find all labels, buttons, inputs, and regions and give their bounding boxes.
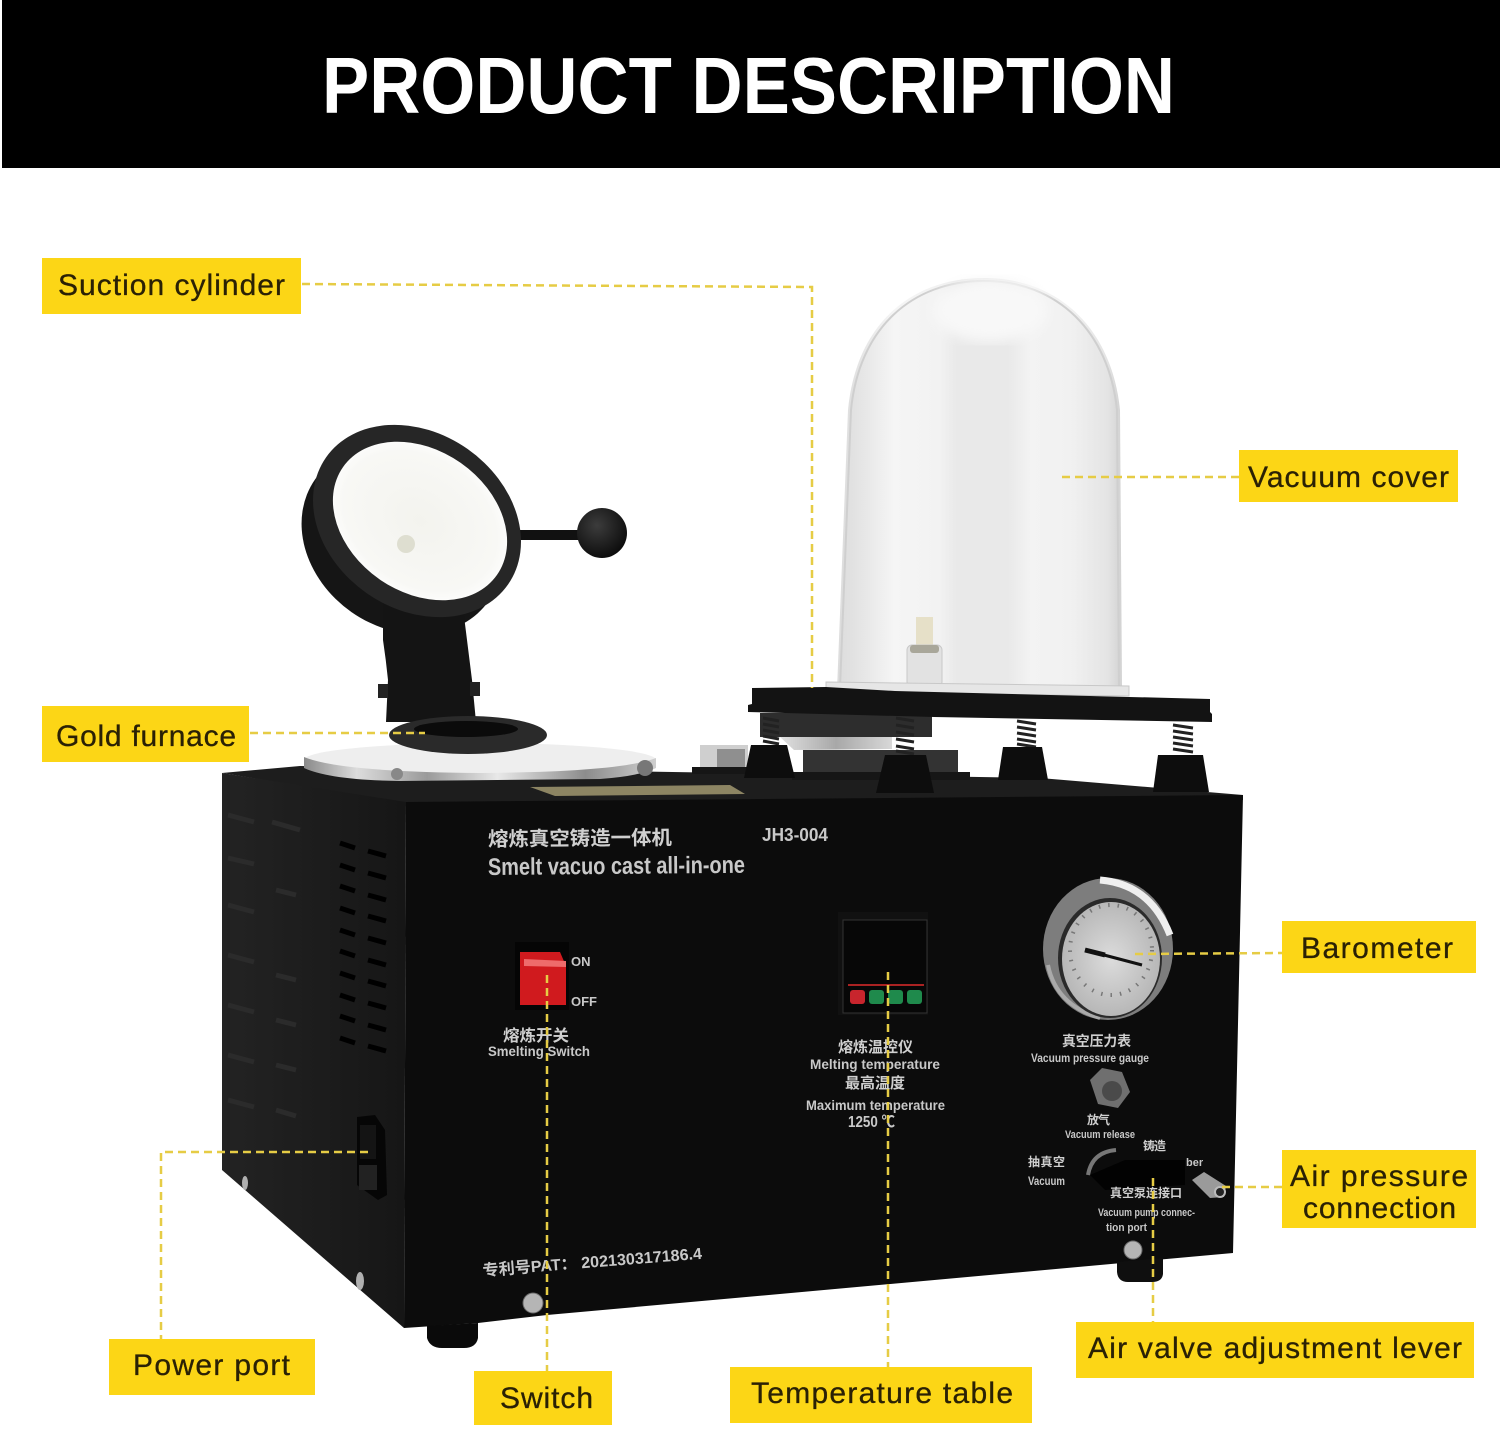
machine body [222,766,1243,1348]
support arm [383,600,476,722]
top surface [222,766,1243,804]
barometer [1031,878,1173,1065]
lid disc [304,743,656,777]
panel screws [523,1293,543,1313]
side panel [222,773,406,1328]
air valve lever: Vacuum [1028,1174,1065,1188]
panel printing: JH3-004 [762,825,828,845]
body feet [427,1323,478,1348]
temperature controller: 熔炼温控仪 [838,1038,913,1056]
label: power port: Power port [133,1349,291,1382]
label: temperature table: Temperature table [751,1377,1013,1410]
front panel [404,795,1243,1328]
handle rod [520,530,582,540]
smelting switch: Smelting Switch [488,1043,590,1059]
pour hole [397,535,415,553]
air connector [1192,1172,1226,1198]
label: vacuum cover [1239,450,1458,502]
label: gold furnace: Gold furnace [56,720,236,753]
title: PRODUCT DESCRIPTION [322,41,1175,130]
temperature controller: Maximum temperature [806,1097,945,1113]
smelting switch: OFF [571,994,597,1009]
label: temperature table [730,1367,1032,1423]
air valve lever: 抽真空 [1028,1154,1065,1169]
rubber feet [744,745,1209,793]
plate [748,687,1212,722]
header band [2,0,1500,168]
vacuum release valve [1065,1068,1135,1141]
crucible rim [276,385,558,657]
chamber disc [803,750,958,776]
vacuum cover dome [826,278,1129,696]
air valve lever [1028,1138,1204,1234]
air valve lever: 真空泵连接口 [1110,1185,1182,1200]
small cylinder [700,745,748,767]
panel printing: Smelt vacuo cast all-in-one [488,852,745,881]
label: gold furnace [42,706,249,762]
barometer: Vacuum pressure gauge [1031,1051,1149,1065]
vacuum plate assembly [692,687,1212,793]
air valve lever: ber [1186,1157,1204,1169]
glass flange [826,682,1129,696]
temperature controller: 1250 ℃ [848,1114,895,1131]
label: switch [474,1371,612,1425]
label: barometer: Barometer [1301,932,1453,965]
air valve lever: 铸造 [1143,1138,1166,1153]
barometer: 真空压力表 [1062,1033,1131,1049]
label: switch: Switch [500,1382,593,1415]
power port [357,1115,387,1200]
panel printing: 熔炼真空铸造一体机 [488,825,672,851]
patent number: 专利号PAT： 202130317186.4 [482,1245,703,1280]
leader lines [161,284,1282,1371]
label: barometer [1282,921,1476,973]
label: air pressure connection: connection [1303,1192,1456,1225]
label: air valve adjustment lever: Air valve adjustment lever [1088,1332,1462,1365]
label: air pressure connection: Air pressure [1290,1160,1468,1193]
label: suction cylinder [42,258,301,314]
springs [763,718,1193,754]
vacuum release valve: 放气 [1087,1112,1110,1127]
air valve lever: tion port [1106,1222,1147,1234]
temperature controller: Melting temperature [810,1056,940,1072]
vacuum release valve: Vacuum release [1065,1129,1135,1141]
air valve lever: Vacuum pump connec- [1098,1207,1195,1219]
panel printing [488,825,828,881]
smelting switch: ON [571,954,590,969]
handle knob [577,508,627,558]
temperature controller [806,912,945,1131]
side vents [340,843,386,1051]
label: power port [109,1339,315,1395]
crucible ceramic [302,409,538,633]
suction nozzle [907,617,942,687]
label: air valve adjustment lever [1076,1322,1474,1378]
crucible back shell [265,407,539,673]
label: vacuum cover: Vacuum cover [1248,461,1449,494]
temperature controller: 最高温度 [845,1074,905,1092]
furnace collar [389,716,547,754]
gold furnace [265,385,656,781]
smelting switch: 熔炼开关 [503,1026,569,1045]
smelting switch [488,942,597,1059]
label: suction cylinder: Suction cylinder [58,269,285,302]
label: air pressure connection [1282,1150,1476,1228]
